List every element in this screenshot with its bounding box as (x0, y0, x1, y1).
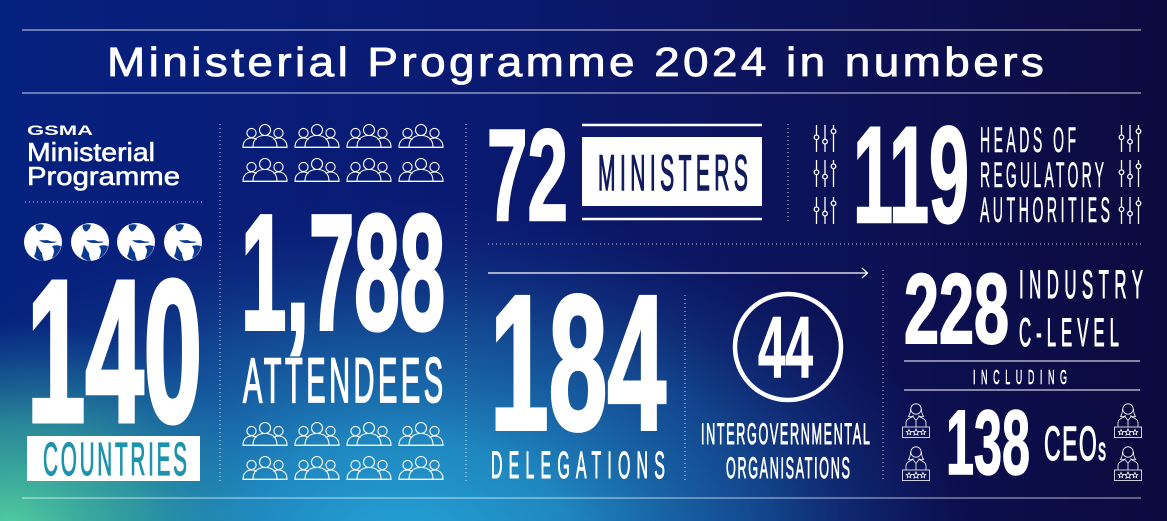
label: heads of regulatory authorities: REGULATORY (980, 155, 1104, 195)
icons: people top (242, 124, 444, 181)
label: intergovernmental organisations: INTERGOVERNMENTAL (701, 417, 870, 451)
label: CEOs: CEOs (1044, 417, 1106, 470)
label: heads of regulatory authorities: AUTHORITIES (980, 190, 1110, 230)
label: countries box: COUNTRIES (43, 434, 187, 485)
number: 140: 140 (27, 238, 202, 464)
number: 72: 72 (487, 102, 568, 248)
circle with 44: 44 (758, 299, 813, 396)
icons: CEO left (902, 404, 930, 480)
text: 1,788 (241, 181, 445, 364)
panel: countries (24, 122, 202, 485)
dividers (22, 124, 1143, 498)
label: delegations: DELEGATIONS (491, 445, 665, 487)
GSMA Ministerial Programme logo (27, 122, 180, 191)
icons: globes (24, 223, 202, 261)
label: intergovernmental organisations (701, 417, 870, 485)
label: industry c-level: INDUSTRY (1019, 263, 1143, 307)
icons: sliders left (814, 125, 836, 224)
icons: sliders right (1119, 125, 1141, 224)
label: heads of regulatory authorities (980, 120, 1110, 230)
GSMA Ministerial Programme logo: Ministerial (27, 137, 155, 167)
panel: regulators (814, 99, 1141, 252)
number: 138: 138 (946, 392, 1030, 494)
label: intergovernmental organisations: ORGANISATIONS (726, 451, 850, 485)
label: attendees: ATTENDEES (243, 347, 443, 416)
number: 228: 228 (904, 253, 1009, 364)
GSMA Ministerial Programme logo: GSMA (27, 122, 93, 138)
label: including (904, 361, 1140, 390)
label: ministers box (582, 125, 762, 219)
arrow (488, 268, 868, 278)
icons: CEO right (1114, 404, 1142, 480)
label: industry c-level: C-LEVEL (1019, 311, 1119, 355)
label: including: INCLUDING (973, 367, 1067, 389)
label: heads of regulatory authorities: HEADS OF (980, 120, 1076, 160)
panel: industry (902, 253, 1143, 494)
circle with 44 (735, 294, 841, 400)
number: 184: 184 (490, 255, 666, 470)
panel: ministers (487, 102, 762, 248)
icons: people bottom (242, 422, 444, 479)
number: 119: 119 (853, 99, 969, 252)
GSMA Ministerial Programme logo: Programme (27, 161, 180, 191)
title band (22, 30, 1141, 93)
panel: intergovernmental organisations (701, 294, 870, 485)
label: industry c-level (1019, 263, 1143, 355)
label: ministers box: MINISTERS (598, 146, 748, 202)
panel: attendees (241, 124, 445, 479)
panel: delegations (490, 255, 666, 487)
title: Ministerial Programme 2024 in numbers (107, 40, 1044, 85)
